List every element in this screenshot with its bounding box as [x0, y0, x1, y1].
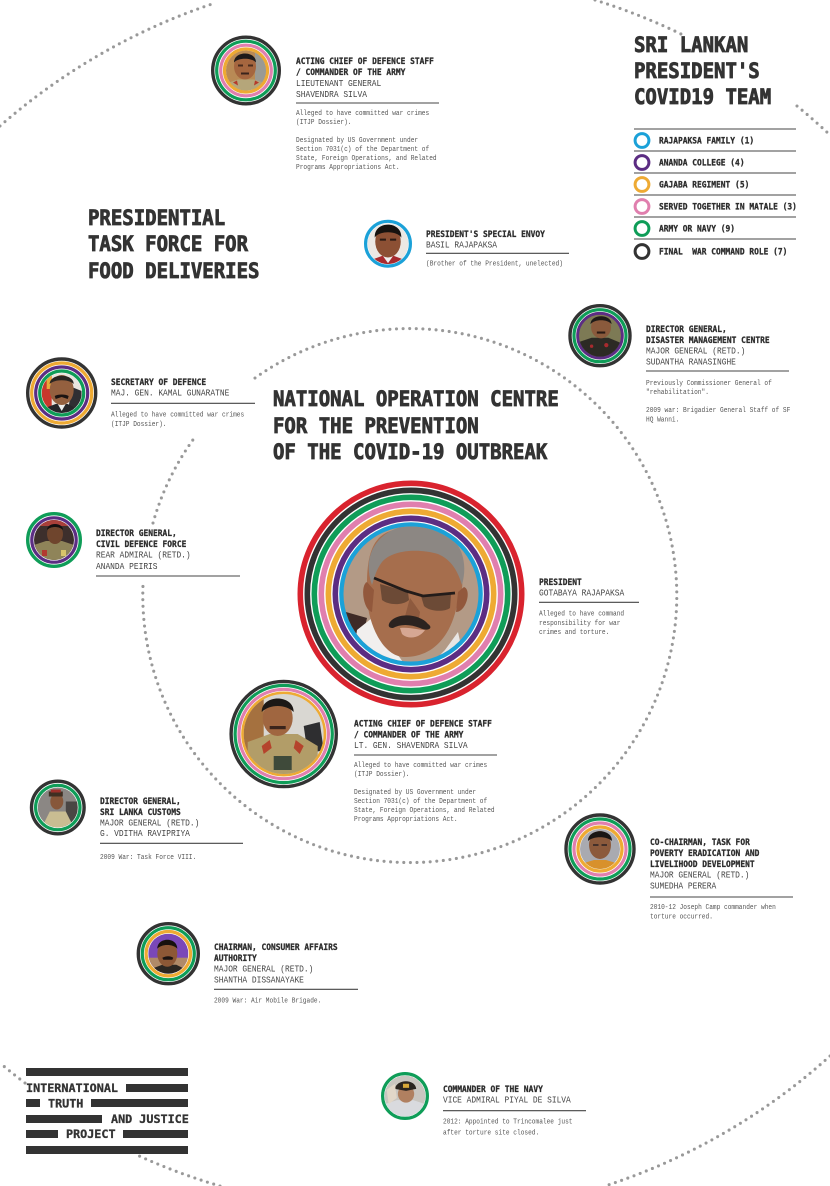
- portrait: G. Vditha Ravipriya: [30, 780, 86, 836]
- text: Shavendra Silva (top): [296, 56, 439, 171]
- text: Sudantha Ranasinghe: "rehabilitation".: [646, 388, 709, 396]
- text: Sudantha Ranasinghe: DISASTER MANAGEMENT CENTRE: [646, 335, 770, 345]
- text: Sumedha Perera: LIVELIHOOD DEVELOPMENT: [650, 859, 755, 869]
- text: Piyal De Silva: COMMANDER OF THE NAVY: [443, 1084, 543, 1094]
- text: G. Vditha Ravipriya: MAJOR GENERAL (RETD.): [100, 818, 199, 829]
- text: Shantha Dissanayake: MAJOR GENERAL (RETD.): [214, 964, 313, 975]
- portrait: Basil Rajapaksa: [364, 220, 412, 268]
- text: Piyal De Silva: VICE ADMIRAL PIYAL DE SILVA: [443, 1095, 572, 1106]
- text: Shavendra Silva (centre): Designated by US Government under: [354, 788, 476, 796]
- portrait: Ananda Peiris: [26, 512, 82, 568]
- text: Shavendra Silva (centre): LT. GEN. SHAVENDRA SILVA: [354, 740, 468, 751]
- text: Basil Rajapaksa: BASIL RAJAPAKSA: [426, 240, 498, 251]
- text: Piyal De Silva: after torture site closed.: [443, 1129, 539, 1137]
- text: Sudantha Ranasinghe: SUDANTHA RANASINGHE: [646, 357, 736, 368]
- legend: [634, 129, 797, 258]
- heading: National Operation Centre: OF THE COVID-19 OUTBREAK: [273, 439, 548, 464]
- heading: Presidential Task Force: TASK FORCE FOR: [88, 231, 249, 256]
- legend: RAJAPAKSA FAMILY (1): [659, 135, 754, 145]
- text: Kamal Gunaratne: Alleged to have committed war crimes: [111, 411, 244, 419]
- text: Sumedha Perera: torture occurred.: [650, 913, 713, 921]
- text: Ananda Peiris: REAR ADMIRAL (RETD.): [96, 550, 191, 561]
- logo: International Truth and Justice Project: INTERNATIONAL: [26, 1081, 118, 1095]
- text: Kamal Gunaratne: [111, 377, 255, 428]
- text: Shantha Dissanayake: [214, 942, 358, 1005]
- heading: National Operation Centre: FOR THE PREVENTION: [273, 413, 479, 438]
- text: President: GOTABAYA RAJAPAKSA: [539, 588, 625, 599]
- text: Shavendra Silva (centre): Programs Appropriations Act.: [354, 815, 458, 823]
- text: Sumedha Perera: MAJOR GENERAL (RETD.): [650, 870, 749, 881]
- text: Ananda Peiris: CIVIL DEFENCE FORCE: [96, 539, 186, 549]
- portrait: Kamal Gunaratne: [26, 357, 97, 429]
- text: Shavendra Silva (top): ACTING CHIEF OF DEFENCE STAFF: [296, 56, 434, 66]
- legend: ANANDA COLLEGE (4): [659, 157, 745, 167]
- text: Shavendra Silva (centre): (ITJP Dossier).: [354, 770, 410, 778]
- text: Ananda Peiris: [96, 528, 240, 576]
- legend: SERVED TOGETHER IN MATALE (3): [659, 201, 797, 211]
- text: Sumedha Perera: [650, 837, 793, 921]
- text: Shavendra Silva (top): Section 7031(c) of the Department of: [296, 145, 429, 153]
- text: Shantha Dissanayake: AUTHORITY: [214, 953, 257, 963]
- text: Basil Rajapaksa: PRESIDENT'S SPECIAL ENVOY: [426, 229, 545, 239]
- text: Shantha Dissanayake: 2009 War: Air Mobile Brigade.: [214, 997, 321, 1005]
- legend: FINAL WAR COMMAND ROLE (7): [659, 246, 787, 256]
- text: Shavendra Silva (top): SHAVENDRA SILVA: [296, 89, 368, 100]
- title: Sri Lankan President's COVID19 Team: [634, 32, 771, 109]
- title: Sri Lankan President's COVID19 Team: SRI LANKAN: [634, 32, 748, 57]
- text: Shantha Dissanayake: SHANTHA DISSANAYAKE: [214, 975, 304, 986]
- heading: Presidential Task Force: PRESIDENTIAL: [88, 205, 225, 230]
- text: Ananda Peiris: ANANDA PEIRIS: [96, 561, 158, 572]
- text: Sudantha Ranasinghe: HQ Wanni.: [646, 416, 679, 424]
- heading: National Operation Centre: NATIONAL OPERATION CENTRE: [273, 386, 559, 411]
- inner dotted circle: [143, 329, 677, 863]
- text: Shavendra Silva (centre): Section 7031(c) of the Department of: [354, 797, 487, 805]
- text: Piyal De Silva: 2012: Appointed to Trincomalee just: [443, 1118, 573, 1126]
- text: Basil Rajapaksa: [426, 229, 569, 268]
- text: Shavendra Silva (top): LIEUTENANT GENERAL: [296, 78, 381, 89]
- text: Shavendra Silva (top): Designated by US Government under: [296, 136, 418, 144]
- text: Sumedha Perera: SUMEDHA PERERA: [650, 881, 717, 892]
- text: Sudantha Ranasinghe: MAJOR GENERAL (RETD.): [646, 346, 745, 357]
- text: President: crimes and torture.: [539, 628, 609, 636]
- text: President: [539, 577, 639, 636]
- text: Shavendra Silva (top): Programs Appropriations Act.: [296, 163, 400, 171]
- portrait: Sumedha Perera: [564, 813, 636, 885]
- heading: Presidential Task Force: [88, 205, 259, 283]
- text: Piyal De Silva: [443, 1084, 586, 1137]
- portrait: Sudantha Ranasinghe: [568, 304, 632, 367]
- legend: ARMY OR NAVY (9): [659, 223, 735, 233]
- text: President: PRESIDENT: [539, 577, 582, 587]
- text: Shavendra Silva (top): / COMMANDER OF THE ARMY: [296, 67, 405, 77]
- text: Shavendra Silva (centre): Alleged to have committed war crimes: [354, 761, 487, 769]
- logo: International Truth and Justice Project: PROJECT: [66, 1127, 116, 1141]
- text: Sumedha Perera: POVERTY ERADICATION AND: [650, 848, 759, 858]
- logo: International Truth and Justice Project: [26, 1068, 189, 1154]
- text: Basil Rajapaksa: (Brother of the President, unelected): [426, 260, 563, 268]
- title: Sri Lankan President's COVID19 Team: PRESIDENT'S: [634, 58, 760, 83]
- text: Shavendra Silva (top): Alleged to have committed war crimes: [296, 109, 429, 117]
- text: Shavendra Silva (centre): / COMMANDER OF THE ARMY: [354, 729, 463, 739]
- text: G. Vditha Ravipriya: 2009 War: Task Force VIII.: [100, 853, 196, 861]
- text: G. Vditha Ravipriya: G. VDITHA RAVIPRIYA: [100, 829, 191, 839]
- text: Sumedha Perera: 2010-12 Joseph Camp commander when: [650, 903, 776, 911]
- logo: International Truth and Justice Project: TRUTH: [48, 1096, 83, 1110]
- portrait: Piyal De Silva: [381, 1072, 429, 1120]
- text: G. Vditha Ravipriya: [100, 796, 243, 861]
- text: Shavendra Silva (centre): State, Foreign Operations, and Related: [354, 806, 495, 814]
- portrait: Shavendra Silva (centre): [229, 680, 338, 788]
- text: Kamal Gunaratne: (ITJP Dossier).: [111, 420, 167, 428]
- text: Sudantha Ranasinghe: Previously Commissioner General of: [646, 379, 772, 387]
- text: G. Vditha Ravipriya: DIRECTOR GENERAL,: [100, 796, 181, 806]
- heading: National Operation Centre: [273, 386, 559, 464]
- text: Sumedha Perera: CO-CHAIRMAN, TASK FOR: [650, 837, 750, 847]
- text: Shavendra Silva (centre): ACTING CHIEF OF DEFENCE STAFF: [354, 718, 492, 728]
- text: Sudantha Ranasinghe: DIRECTOR GENERAL,: [646, 324, 727, 334]
- title: Sri Lankan President's COVID19 Team: COVID19 TEAM: [634, 84, 771, 109]
- text: Shantha Dissanayake: CHAIRMAN, CONSUMER AFFAIRS: [214, 942, 338, 952]
- text: G. Vditha Ravipriya: SRI LANKA CUSTOMS: [100, 807, 181, 817]
- logo: International Truth and Justice Project: AND JUSTICE: [111, 1112, 189, 1126]
- text: Kamal Gunaratne: SECRETARY OF DEFENCE: [111, 377, 206, 387]
- text: Sudantha Ranasinghe: 2009 war: Brigadier General Staff of SF: [646, 407, 790, 414]
- portrait: Shantha Dissanayake: [137, 922, 200, 985]
- text: President: Alleged to have command: [539, 610, 624, 618]
- text: Ananda Peiris: DIRECTOR GENERAL,: [96, 528, 177, 538]
- text: Shavendra Silva (top): State, Foreign Operations, and Related: [296, 154, 437, 162]
- text: Kamal Gunaratne: MAJ. GEN. KAMAL GUNARATNE: [111, 388, 229, 399]
- portrait: Shavendra Silva (top): [211, 36, 281, 106]
- text: Shavendra Silva (top): (ITJP Dossier).: [296, 119, 352, 126]
- text: President: responsibility for war: [539, 619, 620, 627]
- legend: GAJABA REGIMENT (5): [659, 179, 749, 189]
- text: Sudantha Ranasinghe: [646, 324, 790, 424]
- text: Shavendra Silva (centre): [354, 718, 497, 823]
- portrait: President Gotabaya Rajapaksa: [298, 480, 524, 708]
- heading: Presidential Task Force: FOOD DELIVERIES: [88, 258, 259, 283]
